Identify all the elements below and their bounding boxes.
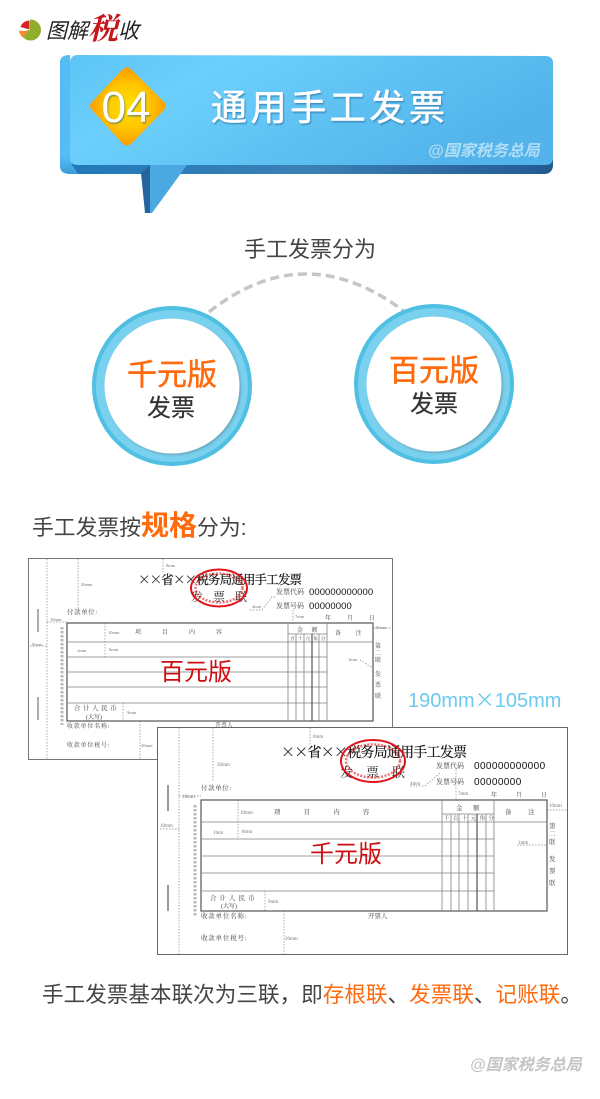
inner disc: [366, 316, 502, 452]
logo accent character: 税: [88, 13, 122, 46]
logo: 图解税收: [18, 13, 142, 46]
dashed arc connector: [209, 274, 405, 312]
banner face: [70, 55, 553, 165]
sub title: 发票联: [191, 588, 257, 605]
label dark: 发票: [410, 391, 458, 418]
table headers: [67, 626, 381, 749]
invoice code: 发票代码: [276, 587, 304, 596]
banner title: 通用手工发票: [211, 87, 449, 128]
table headers: 合计人民币: [74, 703, 119, 712]
speech tail: [141, 165, 187, 213]
invoice number: 发票号码: [276, 601, 304, 610]
sub title: 发票联: [340, 762, 418, 781]
table: [67, 623, 373, 721]
heading: 手工发票按规格分为: 手工发票按规格分为:: [32, 510, 247, 541]
banner lower band: [68, 160, 553, 174]
dimension labels: [31, 563, 387, 748]
table headers: 二: [375, 650, 381, 657]
table headers: 百十元角分: [290, 635, 328, 642]
red stamp: [191, 570, 247, 606]
banner left side: [60, 55, 78, 174]
label orange: 百元版: [389, 355, 479, 388]
ring: [94, 308, 250, 464]
dimension labels: 1mm: [348, 657, 358, 662]
date: 年 月 日: [325, 614, 375, 622]
edition label: 千元版: [310, 841, 382, 868]
table headers: 开票人: [215, 721, 233, 729]
table headers: 联: [375, 656, 381, 664]
banner: 04 通用手工发票: [60, 55, 553, 213]
size label: 190mm×105mm: [408, 684, 561, 713]
dimension labels: 10mm: [50, 617, 62, 622]
dimension labels: 1mm: [77, 648, 87, 653]
dimension labels: 10mm: [31, 642, 43, 647]
dimension labels: 10mm: [108, 630, 120, 635]
invoice diagram: 千元版: 00000000: [474, 777, 522, 788]
table headers: 收款单位税号:: [201, 933, 247, 942]
label dark: 发票: [147, 395, 195, 422]
invoice title: ××省××税务局通用手工发票: [281, 742, 467, 762]
table headers: 第: [375, 642, 381, 650]
label orange: 千元版: [127, 359, 217, 392]
dimension labels: 10mm: [375, 625, 387, 630]
dimension labels: 4mm: [410, 782, 420, 787]
dimension labels: 1mm: [518, 841, 528, 846]
table headers: 联: [549, 878, 556, 887]
number diamond: [90, 68, 166, 146]
dimension labels: 10mm: [240, 811, 253, 816]
table headers: 收款单位税号:: [67, 741, 110, 749]
invoice title: ××省××税务局通用手工发票: [138, 570, 302, 588]
table headers: 联: [375, 692, 381, 700]
dimension labels: 8mm: [166, 563, 176, 568]
table headers: 项 目 内 容: [135, 628, 222, 636]
invoice diagram: 百元版: 000000000000: [309, 587, 373, 598]
table headers: 千百十元角分: [444, 814, 497, 822]
dimension labels: 1mm: [213, 831, 223, 836]
table headers: 金 额: [456, 803, 480, 812]
dimension labels: 10mm: [182, 795, 195, 800]
dimension labels: [160, 735, 562, 942]
dimension labels: 7mm: [295, 614, 305, 619]
inner disc: [104, 318, 240, 454]
ring: [356, 306, 512, 462]
table headers: 发: [375, 670, 381, 678]
heading: 手工发票分为: 手工发票分为: [244, 237, 376, 262]
table headers: (大写): [221, 902, 237, 910]
dimension labels: 9mm: [268, 900, 278, 905]
table headers: 联: [549, 837, 556, 846]
invoice diagram: 百元版: 00000000: [309, 601, 352, 612]
invoice number: 发票号码: [436, 777, 464, 786]
dimension labels: 9mm: [127, 710, 137, 715]
table headers: 票: [375, 681, 381, 689]
summary sentence: 手工发票基本联次为三联，即存根联、发票联、记账联。: [42, 978, 582, 1009]
red stamp: [341, 740, 405, 782]
number 04: 04: [102, 83, 150, 132]
table headers: 项 目 内 容: [274, 807, 370, 816]
dimension labels: 20mm: [285, 937, 298, 942]
paper: [28, 558, 392, 760]
table headers: 备 注: [335, 629, 362, 637]
dimension labels: 10mm: [160, 824, 173, 829]
table headers: 发: [549, 854, 556, 863]
dimension labels: 8mm: [242, 830, 252, 835]
dimension labels: 7mm: [458, 792, 468, 797]
table headers: (大写): [86, 713, 102, 721]
banner watermark: @国家税务总局: [428, 142, 541, 160]
table headers: 金 额: [297, 626, 319, 634]
payer: 付款单位:: [67, 607, 98, 616]
circle: 千元版发票: [94, 308, 250, 464]
icon: pie chart: [18, 20, 41, 40]
invoice diagram: 千元版: [158, 728, 568, 954]
logo end character: 收: [118, 20, 142, 43]
dimension labels: 26mm: [217, 763, 230, 768]
date: 年 月 日: [491, 791, 547, 799]
guide marks: [30, 559, 392, 759]
guide marks: [160, 728, 567, 954]
paper: [158, 728, 568, 954]
table: [201, 800, 547, 911]
table headers: 合计人民币: [210, 893, 258, 902]
dimension labels: 26mm: [81, 582, 93, 587]
table headers: 收款单位名称:: [67, 722, 110, 730]
invoice code: 发票代码: [436, 761, 464, 770]
table headers: [201, 803, 556, 942]
table headers: 二: [549, 830, 556, 838]
dimension labels: 20mm: [141, 743, 153, 748]
table headers: 备 注: [505, 807, 535, 816]
footer watermark: @国家税务总局: [470, 1056, 583, 1074]
dimension labels: 4mm: [252, 604, 262, 609]
invoice diagram: 千元版: 000000000000: [474, 761, 546, 772]
invoice diagram: 百元版: [28, 558, 392, 760]
table headers: 票: [549, 866, 556, 875]
table headers: 第: [549, 821, 556, 830]
edition label: 百元版: [160, 659, 232, 686]
logo text: 图解: [46, 20, 91, 43]
circle: 百元版发票: [356, 306, 512, 462]
dimension labels: 10mm: [549, 804, 562, 809]
dimension labels: 8mm: [109, 647, 119, 652]
payer: 付款单位:: [201, 783, 232, 792]
table headers: 开票人: [368, 911, 388, 920]
dimension labels: 8mm: [313, 735, 323, 740]
table headers: 收款单位名称:: [201, 911, 247, 920]
